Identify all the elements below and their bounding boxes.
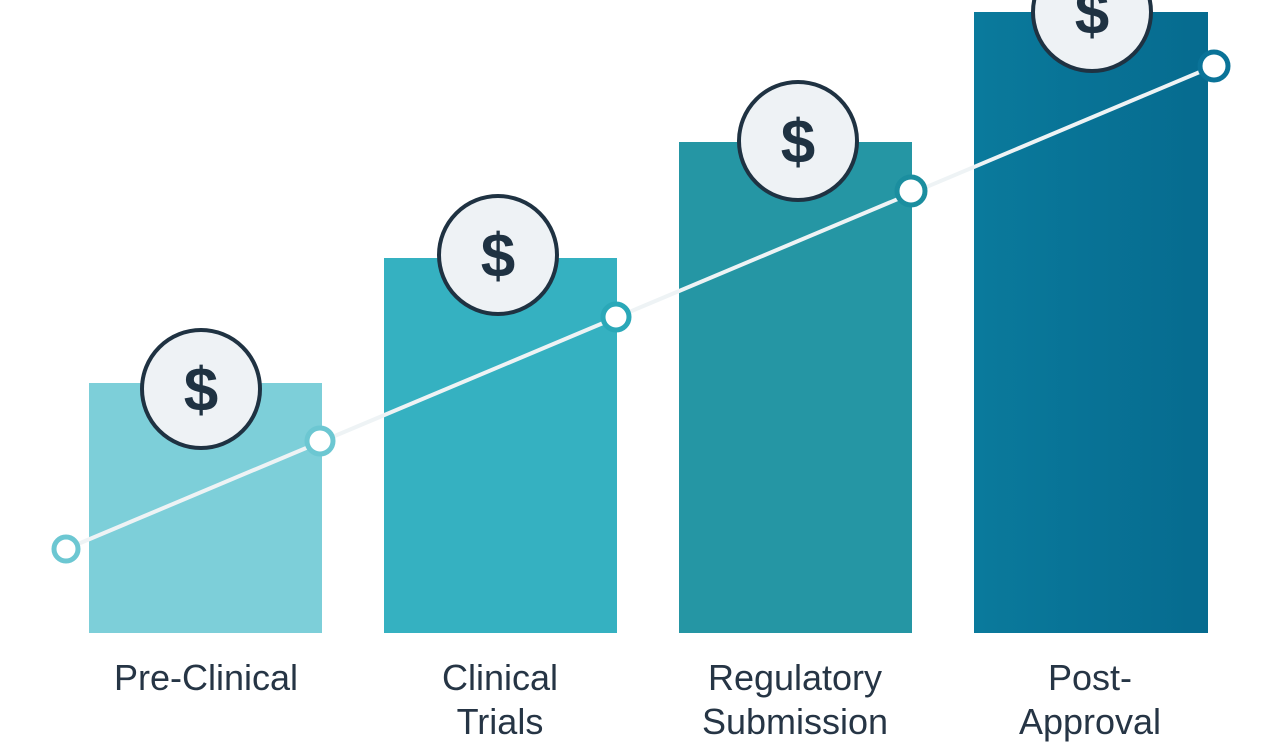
label: post-approval <box>1019 657 1161 742</box>
icon: dollar coin 3 <box>739 82 857 200</box>
label: post-approval: Approval <box>1019 701 1161 742</box>
bar: post-approval <box>974 12 1208 633</box>
icon: dollar coin 3: $ <box>781 108 815 177</box>
label: regulatory submission: Regulatory <box>708 657 882 698</box>
label: regulatory submission: Submission <box>702 701 888 742</box>
bar: pre-clinical <box>89 383 322 633</box>
label: pre-clinical: Pre-Clinical <box>114 657 298 698</box>
icon: dollar coin 4 <box>1033 0 1151 71</box>
bar: clinical trials <box>384 258 617 633</box>
icon: dollar coin 1: $ <box>184 356 218 425</box>
trend line <box>54 52 1228 561</box>
icon: dollar coin 2 <box>439 196 557 314</box>
label: clinical trials <box>442 657 558 742</box>
label: clinical trials: Clinical <box>442 657 558 698</box>
label: clinical trials: Trials <box>457 701 543 742</box>
label: regulatory submission <box>702 657 888 742</box>
icon: dollar coin 1 <box>142 330 260 448</box>
label: post-approval: Post- <box>1048 657 1132 698</box>
icon: dollar coin 2: $ <box>481 222 515 291</box>
bar: regulatory submission <box>679 142 912 633</box>
